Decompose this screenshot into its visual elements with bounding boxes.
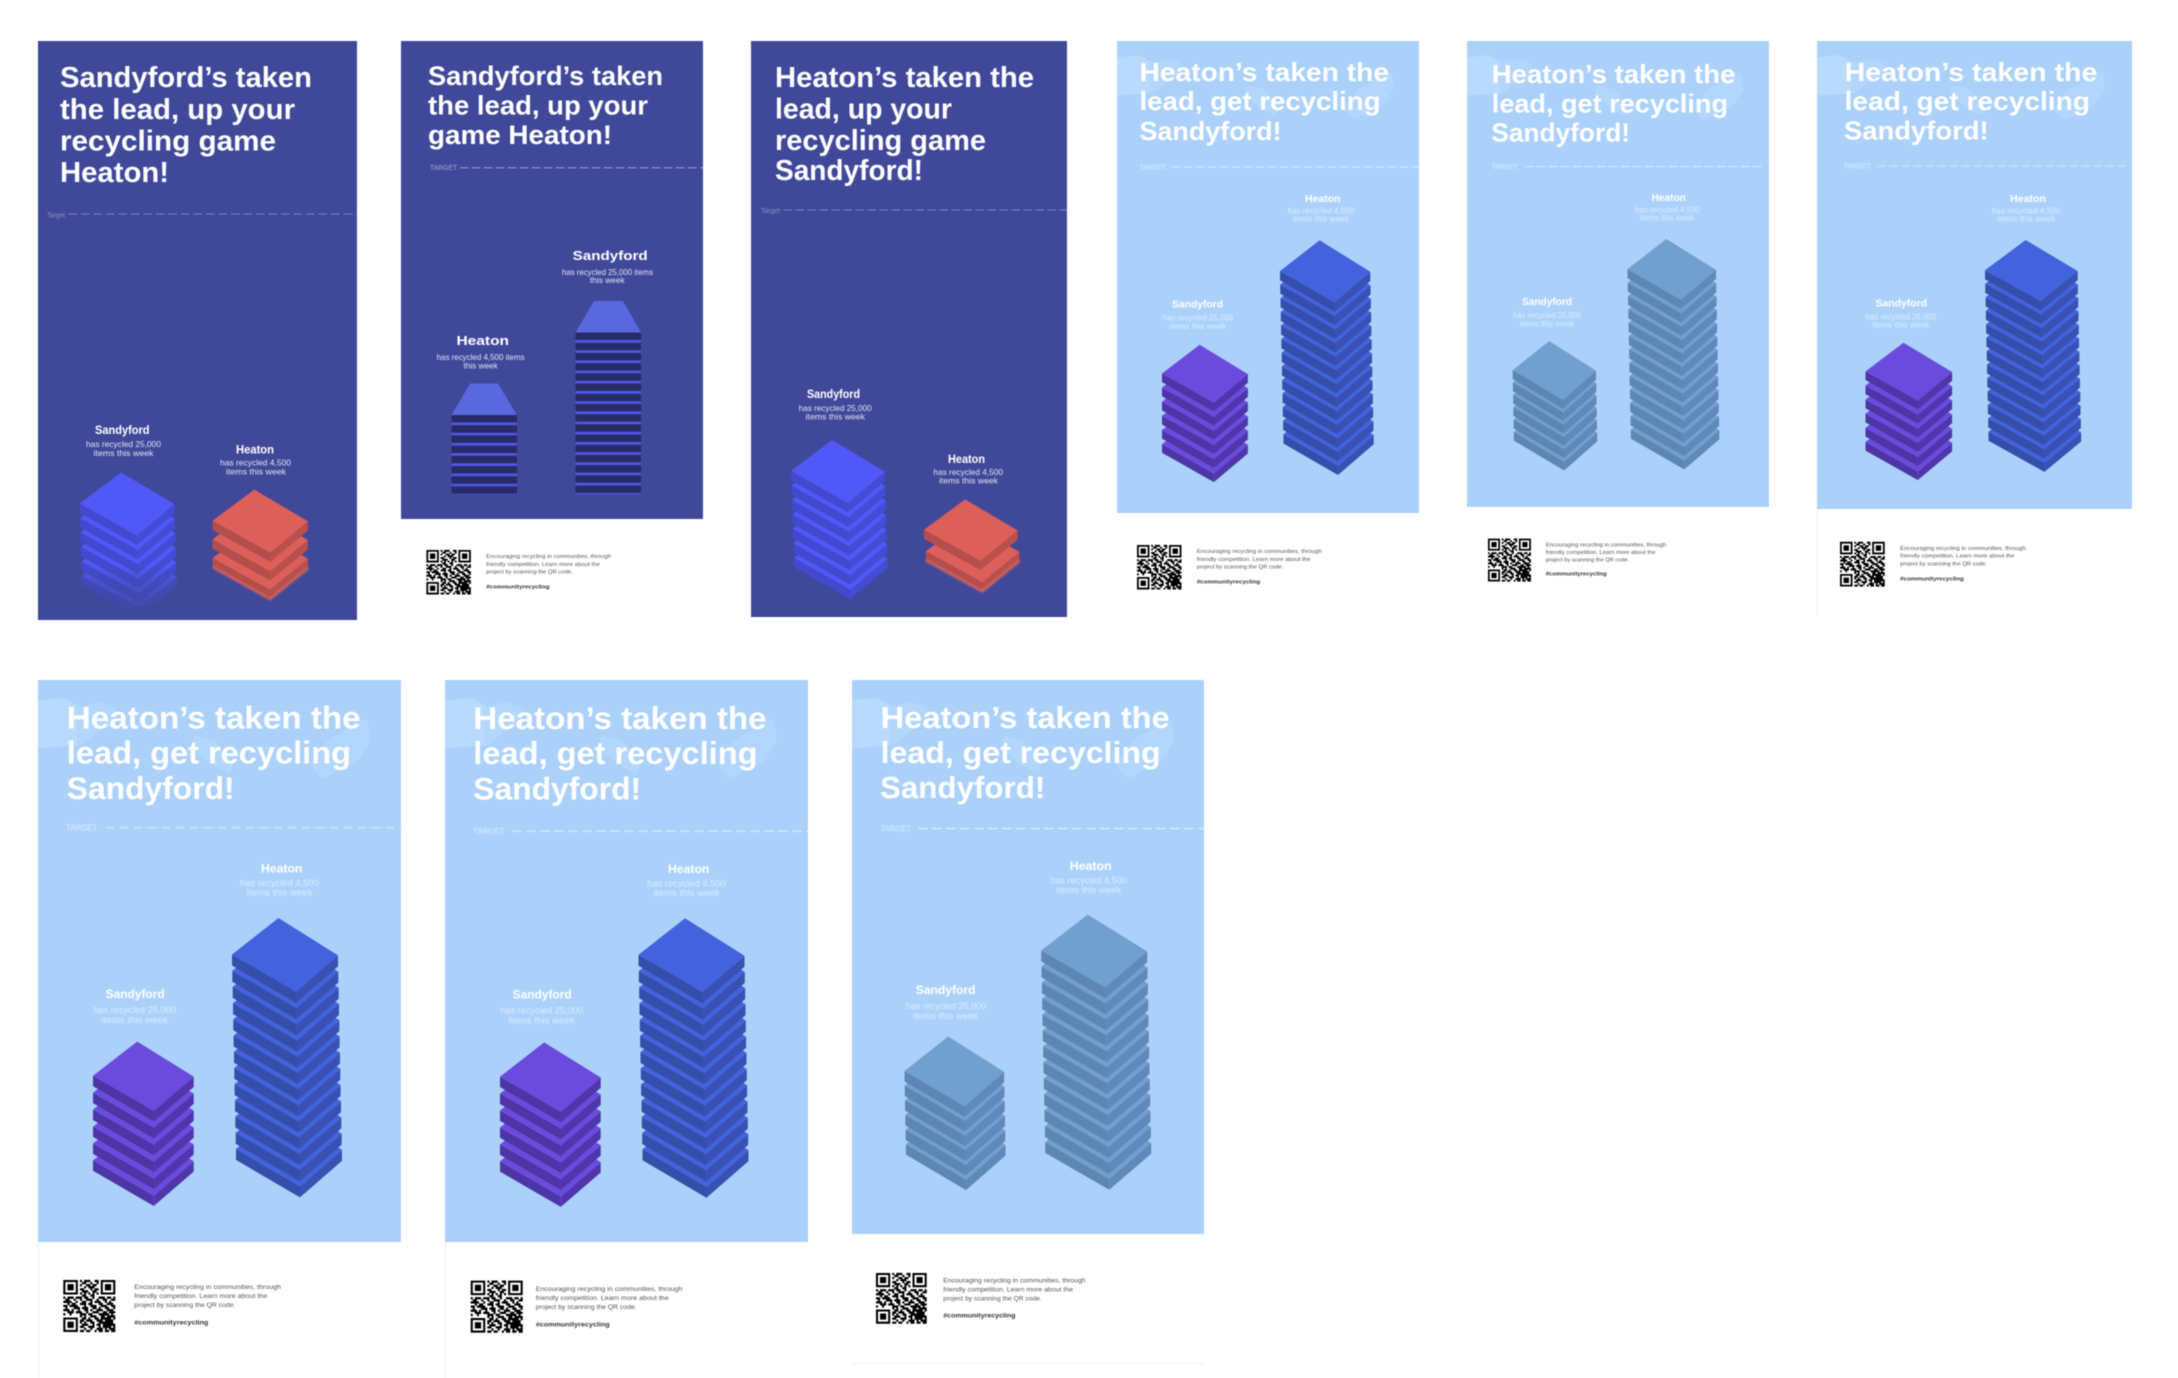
footer text: #communityrecycling [943,1312,1015,1319]
label: Sandyford: has recycled 25,000 [500,1006,583,1016]
label: Sandyford: Sandyford [916,983,975,997]
label: Heaton: items this week [1640,214,1695,223]
heading [67,700,361,806]
label: Heaton [220,444,291,476]
stack: Heaton red [212,490,308,599]
footer text: Encouraging recycling in communities, through [536,1286,683,1293]
poster 3: Heaton leads, dark blue [751,41,1067,617]
poster 5: Heaton leads, muted stacks [1467,41,1769,582]
heading: lead, get recycling [881,735,1161,770]
footer text: friendly competition. Learn more about the [1197,557,1311,563]
heading: Heaton’s taken the [1845,57,2097,87]
heading: lead, get recycling [1140,86,1380,116]
label: Sandyford [93,987,176,1026]
target line: Target [761,208,780,215]
footer text: friendly competition. Learn more about the [943,1287,1073,1294]
footer [471,1281,683,1333]
QR code [1840,542,1885,587]
label: Sandyford: Sandyford [106,987,165,1001]
footer text [134,1284,281,1326]
panel background [401,41,703,519]
label: Sandyford: items this week [913,1011,978,1022]
label: Heaton: this week [464,360,498,370]
QR code [471,1281,523,1333]
label: Sandyford [1163,299,1234,331]
label: Sandyford: items this week [806,411,866,421]
label: Sandyford: items this week [1520,319,1575,328]
label: Sandyford: Sandyford [807,389,860,401]
QR code [876,1273,927,1324]
footer text: Encouraging recycling in communities, through [134,1284,281,1291]
clouds [448,701,774,775]
heading [473,700,766,806]
label: Sandyford: has recycled 25,000 items [562,267,653,277]
label: Sandyford [906,983,986,1022]
heading [60,62,312,189]
stack: Sandyford [93,1042,194,1206]
footer text: project by scanning the QR code. [536,1304,637,1311]
footer text: #communityrecycling [1900,576,1964,582]
heading: Heaton’s taken the [67,700,361,736]
poster 1: Sandyford leads, dark blue [38,41,357,620]
panel background [1467,41,1769,507]
bar: Heaton [452,384,517,494]
footer text: Encouraging recycling in communities, through [1900,546,2026,552]
label: Sandyford: Sandyford [1172,299,1223,311]
footer text: project by scanning the QR code. [1900,561,1987,567]
footer text: Encouraging recycling in communities, through [486,554,611,560]
label: Heaton: Heaton [2010,193,2046,205]
clouds [1820,58,2103,117]
footer text: project by scanning the QR code. [943,1295,1042,1302]
target line: TARGET [66,823,98,832]
label: Sandyford [500,988,583,1026]
label: Heaton: has recycled 4,500 [647,878,726,890]
label: Heaton: Heaton [1305,193,1340,205]
target line: Target [47,212,65,220]
stack: Sandyford [500,1042,601,1207]
footer text: Encouraging recycling in communities, through [943,1278,1086,1285]
panel background [1117,41,1419,513]
heading: Sandyford! [67,770,235,806]
label: Heaton: has recycled 4,500 items [437,352,525,362]
heading: Sandyford! [1140,116,1282,146]
label: Sandyford [562,248,653,285]
stack: Heaton [1280,240,1374,475]
poster 6: Heaton leads, light blue [1817,41,2132,617]
label: Heaton: has recycled 4,500 [933,467,1003,477]
footer [1840,542,2026,587]
label: Heaton [1288,193,1355,224]
heading: Sandyford’s taken [60,62,312,94]
footer text: friendly competition. Learn more about the [134,1293,268,1300]
heading: Sandyford! [473,770,641,806]
label: Sandyford [799,389,872,421]
heading: recycling game [60,126,276,158]
label: Heaton: items this week [1997,214,2056,224]
heading: lead, get recycling [1492,89,1728,119]
heading: Heaton’s taken the [775,62,1034,94]
label: Sandyford: this week [590,275,625,285]
footer text [536,1286,683,1329]
label: Sandyford: Sandyford [1876,297,1927,309]
footer text: #communityrecycling [1546,572,1607,578]
heading: lead, get recycling [473,735,758,771]
heading: Sandyford! [775,155,923,187]
stack: Heaton [1985,240,2081,472]
label: Heaton: items this week [939,476,999,486]
label: Heaton: items this week [654,888,720,899]
label: Heaton [437,333,525,370]
label: Heaton [1992,193,2061,224]
QR code [426,550,471,594]
label: Sandyford: Sandyford [573,248,648,263]
label: Sandyford: has recycled 25,000 [1513,311,1582,320]
label: Heaton: items this week [1293,214,1350,224]
label: Sandyford: Sandyford [95,425,150,437]
footer text: #communityrecycling [536,1322,610,1329]
heading [880,700,1170,805]
footer text: project by scanning the QR code. [134,1302,235,1309]
footer text [1546,542,1666,578]
poster 7: Heaton leads, large [38,680,401,1378]
label: Sandyford: items this week [1872,321,1930,330]
heading: lead, get recycling [1845,86,2090,116]
label: Heaton [1050,859,1127,896]
label: Heaton [1635,192,1700,223]
heading: Heaton’s taken the [1492,59,1735,89]
label: Heaton: items this week [1056,885,1121,896]
footer text [1900,546,2026,582]
heading: lead, up your [775,94,952,126]
footer text: #communityrecycling [1197,579,1261,585]
heading [775,62,1034,187]
footer text: Encouraging recycling in communities, through [1546,542,1666,548]
label: Heaton: Heaton [668,862,709,876]
QR code [1488,539,1531,582]
footer [876,1273,1086,1324]
panel background [751,41,1067,617]
heading: recycling game [775,125,986,157]
label: Heaton: Heaton [1070,859,1112,873]
footer [1137,545,1322,589]
label: Heaton: items this week [247,887,313,898]
stack glow [213,567,308,599]
footer text: Encouraging recycling in communities, through [1197,549,1322,555]
heading: Heaton’s taken the [881,700,1170,735]
footer [1488,539,1666,582]
heading [428,61,663,150]
label: Sandyford: Sandyford [1522,296,1572,308]
label: Sandyford: items this week [94,448,154,458]
label: Heaton: Heaton [1652,192,1686,204]
heading [1140,57,1389,146]
footer text: #communityrecycling [134,1320,208,1326]
label: Heaton: items this week [226,466,287,476]
poster 2: Sandyford leads, front-view stacks [401,41,703,594]
heading: the lead, up your [60,94,295,126]
label: Sandyford: has recycled 25,000 [906,1001,986,1012]
footer [63,1280,281,1332]
stack glow [926,560,1020,592]
clouds [1469,58,1741,117]
label: Heaton: Heaton [236,444,274,456]
heading: Sandyford’s taken [428,61,663,91]
label: Heaton: has recycled 4,500 [220,458,291,468]
target line: TARGET [881,824,911,833]
heading [1844,57,2097,146]
panel background [445,680,808,1242]
bar: Sandyford [576,301,641,494]
footer [426,550,611,594]
label: Sandyford: items this week [508,1016,575,1026]
poster 4: Heaton leads, light blue [1117,41,1419,589]
QR code [1137,545,1181,589]
footer text: project by scanning the QR code. [1197,565,1284,571]
QR code [63,1280,115,1332]
panel background [1817,41,2132,509]
heading: game Heaton! [428,120,612,150]
footer text: friendly competition. Learn more about the [536,1295,669,1302]
heading: Sandyford! [1844,116,1989,146]
target line: TARGET [473,827,505,836]
label: Heaton: has recycled 4,500 [1288,206,1355,215]
label: Sandyford: has recycled 25,000 [799,403,872,413]
stack: Heaton [1628,239,1719,470]
stack: Sandyford [904,1036,1006,1190]
label: Heaton: Heaton [456,333,509,348]
heading: Heaton’s taken the [1140,57,1389,87]
label: Sandyford: has recycled 25,000 [93,1005,176,1016]
target line: TARGET [430,165,458,172]
clouds [1119,58,1391,117]
footer text: project by scanning the QR code. [1546,557,1630,563]
footer text: friendly competition. Learn more about the [1900,554,2015,560]
footer text: friendly competition. Learn more about the [1546,550,1655,556]
panel background [852,680,1204,1234]
stack: Heaton [232,918,342,1197]
target line: TARGET [1492,164,1519,171]
target line: TARGET [1140,164,1167,171]
label: Sandyford [1513,296,1582,328]
label: Heaton: has recycled 4,500 [1050,876,1127,886]
label: Sandyford: Sandyford [513,988,572,1002]
stack: Sandyford [1866,343,1952,480]
stack: Sandyford [1162,345,1248,482]
label: Sandyford: items this week [102,1015,168,1026]
label: Sandyford: has recycled 25,000 [1866,312,1937,322]
footer text: friendly competition. Learn more about the [486,562,600,568]
clouds [855,701,1171,775]
label: Heaton: has recycled 4,500 [240,878,319,889]
label: Sandyford: items this week [1170,322,1227,331]
heading: Sandyford! [1491,118,1630,148]
stack: Heaton [638,918,748,1198]
panel background [38,680,401,1242]
stack: Heaton [1041,915,1151,1190]
stack: Sandyford [1513,341,1597,471]
heading: Sandyford! [880,770,1045,805]
footer text: project by scanning the QR code. [486,570,573,576]
panel background [38,41,357,620]
stack: Heaton red [924,499,1019,592]
heading: the lead, up your [428,91,648,121]
poster 9: Heaton leads, muted stacks [852,680,1204,1364]
footer text [1197,549,1322,585]
label: Heaton: Heaton [261,862,302,876]
label: Sandyford: has recycled 25,000 [1163,314,1234,323]
stack: Sandyford blue [80,472,177,617]
label: Heaton [240,862,319,898]
stack: Sandyford blue [791,440,888,599]
label: Heaton [933,454,1003,486]
clouds [41,701,367,775]
heading [1491,59,1735,148]
footer text: #communityrecycling [486,584,550,590]
target line: TARGET [1844,164,1871,170]
label: Sandyford [86,425,161,458]
label: Sandyford: has recycled 25,000 [86,439,161,449]
footer text [943,1278,1086,1319]
label: Heaton: Heaton [948,454,985,466]
label: Heaton: has recycled 4,500 [1635,206,1700,215]
label: Sandyford [1866,297,1937,330]
heading: Heaton’s taken the [473,700,766,736]
stack fade [74,565,186,619]
heading: Heaton! [60,157,169,189]
label: Heaton [647,862,726,899]
heading: lead, get recycling [67,734,351,770]
label: Heaton: has recycled 4,500 [1992,206,2061,215]
poster 8: Heaton leads, large [445,680,808,1378]
footer text [486,554,611,590]
